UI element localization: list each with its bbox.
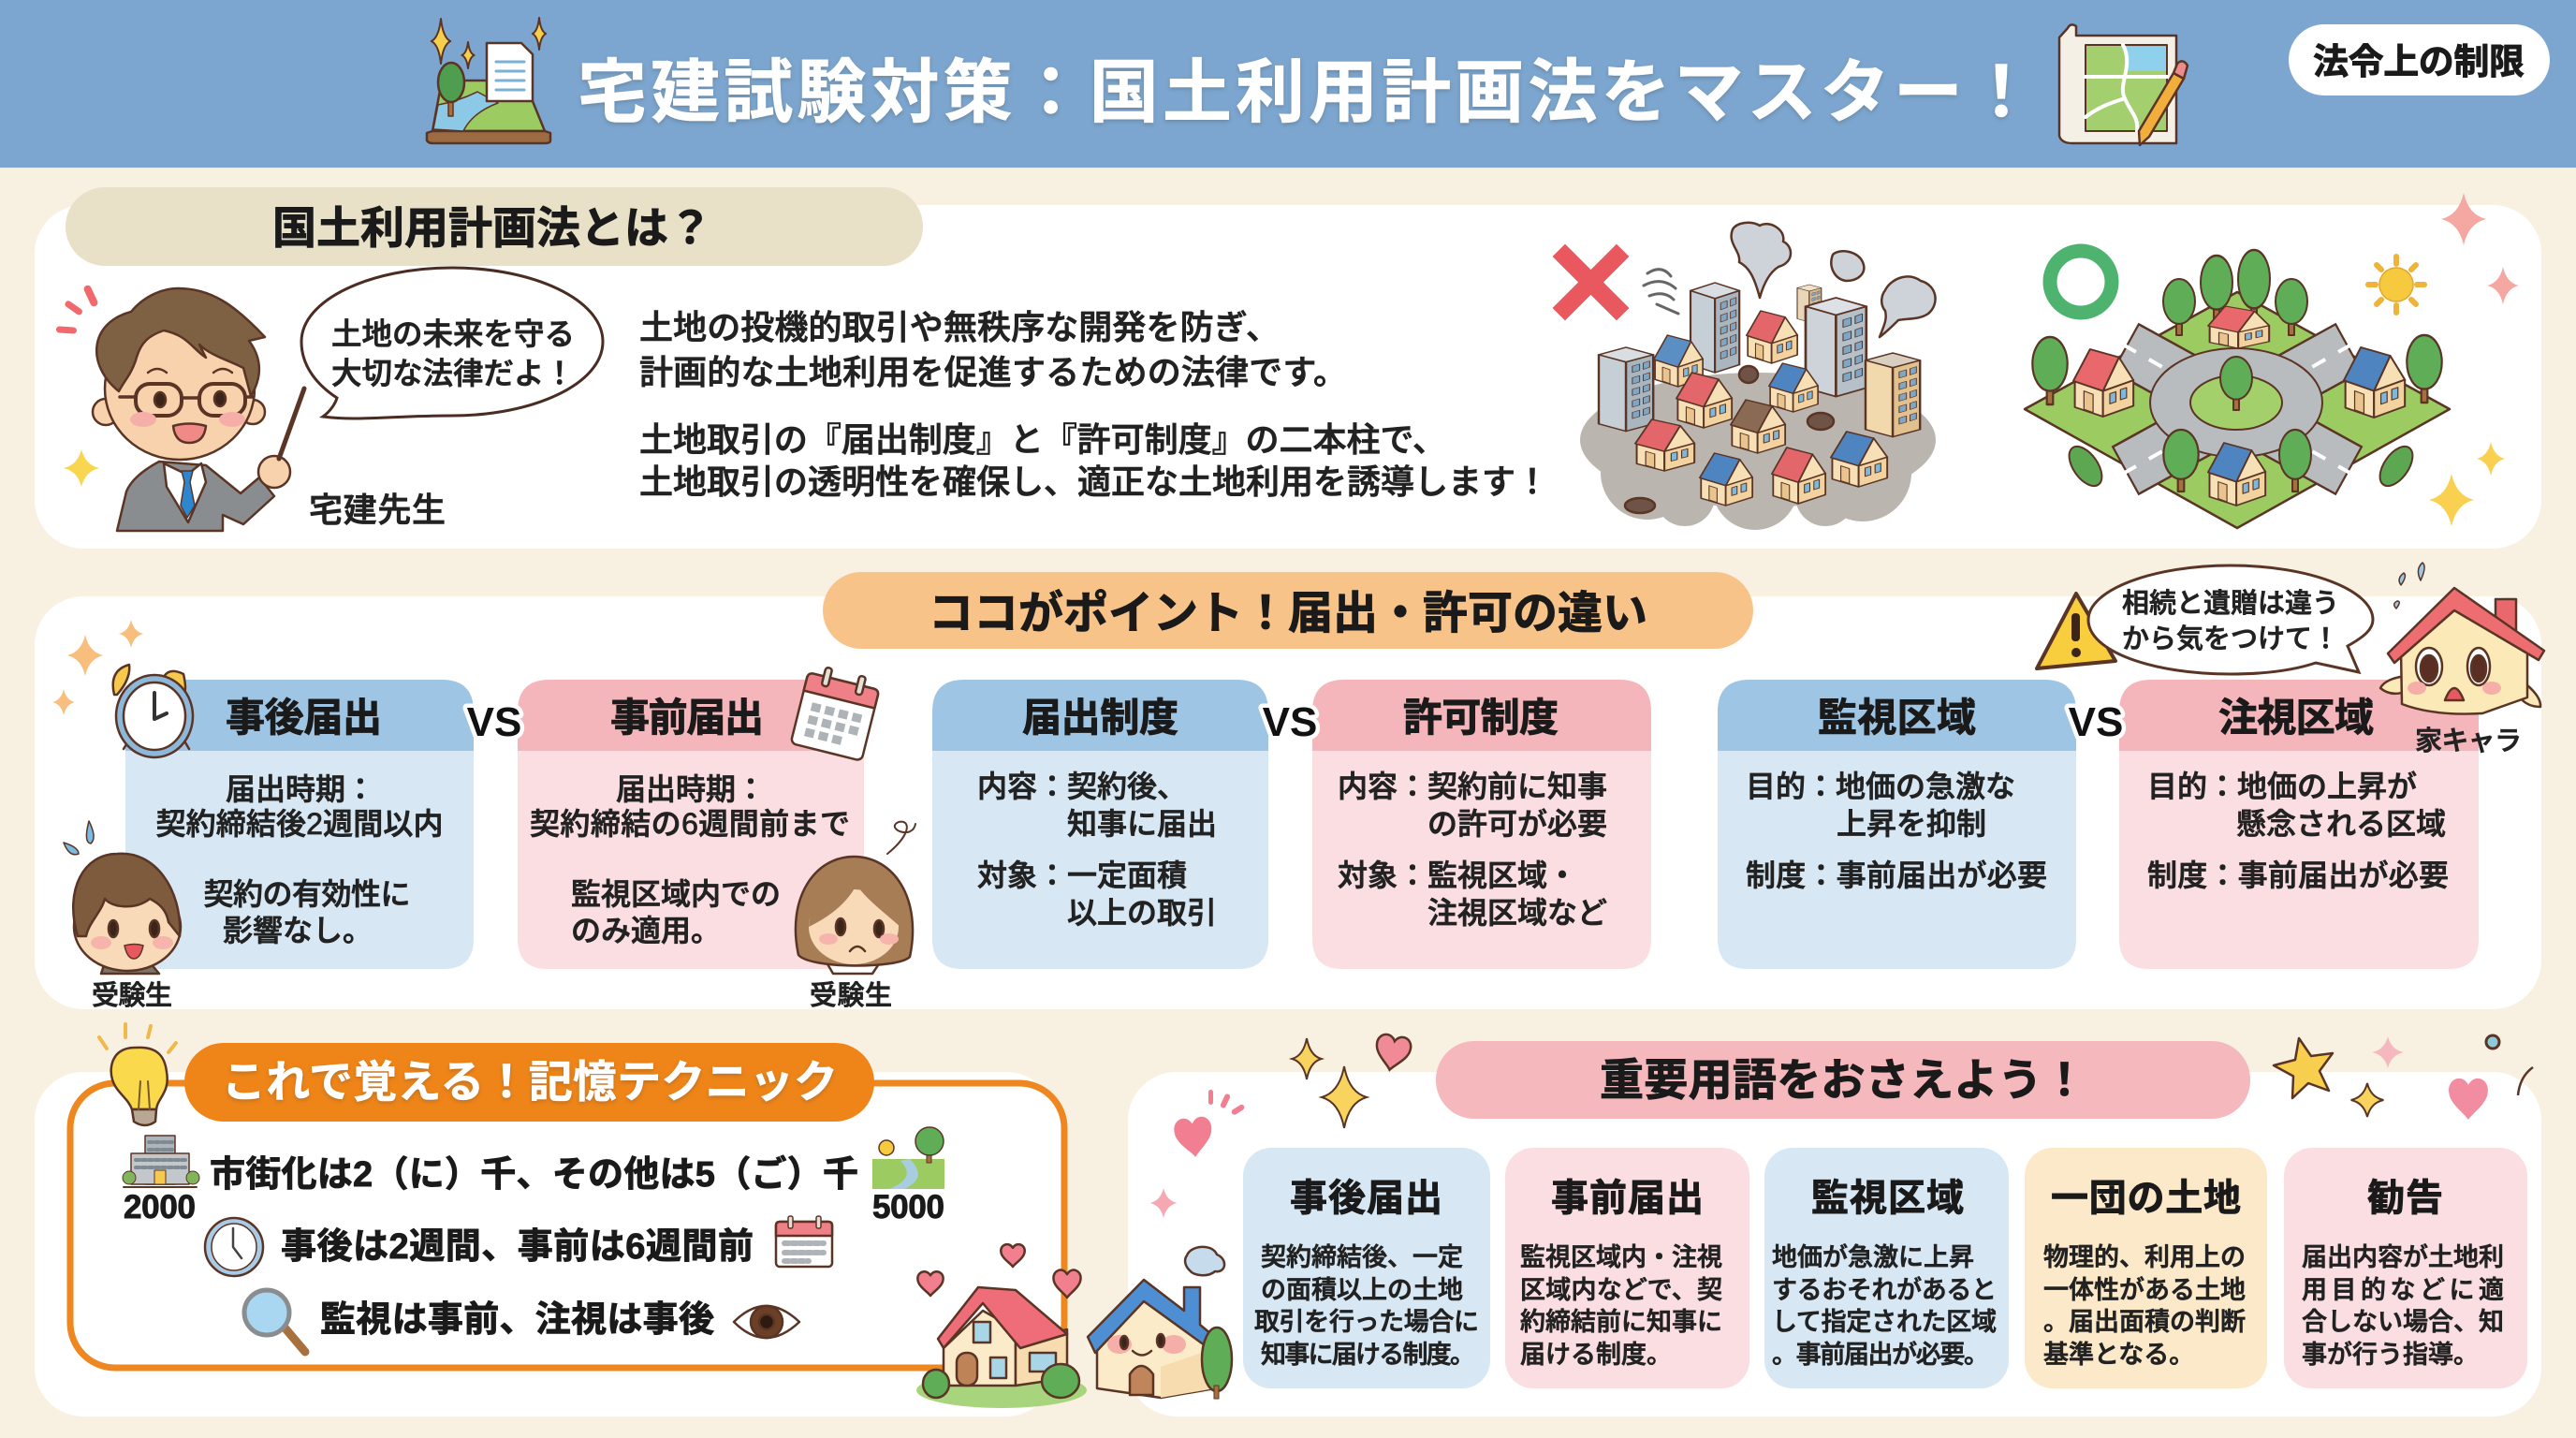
term card: 事前届出: 事前届出 <box>1551 1178 1704 1219</box>
card: 届出制度: 対象：一定面積 <box>977 858 1187 892</box>
panel: 国土利用計画法とは <box>35 187 2541 549</box>
term card: 勧告: 届出内容が土地利 <box>2302 1243 2504 1271</box>
card: 事前届出: 契約締結の6週間前まで <box>530 807 850 841</box>
term card: 事前届出: 区域内などで、契 <box>1520 1276 1722 1304</box>
vs badge: VS <box>1263 699 1317 745</box>
heading pill <box>823 572 1753 649</box>
card: 事後届出: 届出時期： <box>226 772 375 806</box>
sparkles <box>2429 193 2519 526</box>
speech bubble: teacher <box>301 268 603 418</box>
term card: 監視区域: 。事前届出が必要。 <box>1772 1341 1989 1369</box>
term card: 監視区域: して指定された区域 <box>1772 1308 1997 1336</box>
icon: calendar <box>791 664 882 761</box>
title: 宅建試験対策：国土利用計画法をマスター！ <box>578 53 2036 131</box>
term card: 事後届出: の面積以上の土地 <box>1261 1276 1463 1304</box>
illustration: blue roof house smiling <box>1088 1247 1232 1399</box>
term card: 事後届出: 契約締結後、一定 <box>1261 1243 1463 1271</box>
card: 注視区域: 懸念される区域 <box>2236 807 2446 841</box>
card: 許可制度 <box>1312 680 1651 969</box>
icon: warning triangle <box>2037 594 2115 668</box>
card: 事前届出: のみ適用。 <box>571 914 721 947</box>
icon: eye <box>734 1306 799 1338</box>
term card: 一団の土地: 。届出面積の判断 <box>2043 1308 2246 1336</box>
card: 事後届出: 契約締結後2週間以内 <box>155 807 444 841</box>
card: 事前届出: 届出時期： <box>616 772 766 806</box>
card: 監視区域: 上昇を抑制 <box>1837 807 1986 841</box>
vs badge: VS <box>2069 699 2123 745</box>
text: description: 計画的な土地利用を促進するための法律です。 <box>639 353 1347 391</box>
text: description: 土地の投機的取引や無秩序な開発を防ぎ、 <box>639 308 1280 346</box>
speech bubble: teacher: 土地の未来を守る <box>331 317 575 351</box>
term card: 監視区域: するおそれがあると <box>1772 1276 1997 1304</box>
term card: 監視区域: 監視区域 <box>1811 1178 1964 1219</box>
term card: 事前届出: 届ける制度。 <box>1520 1341 1672 1369</box>
speech bubble: house character: から気をつけて！ <box>2122 624 2339 654</box>
illustration: red roof house with hearts <box>916 1244 1087 1408</box>
icon: buildings <box>123 1136 199 1187</box>
card: 届出制度 <box>932 680 1268 969</box>
term card: 事前届出: 約締結前に知事に <box>1520 1308 1722 1336</box>
card: 事後届出: 契約の有効性に <box>204 877 410 911</box>
text: mnemonic 2: 事後は2週間、事前は6週間前 <box>281 1227 754 1267</box>
vs badge: VS <box>467 699 521 745</box>
heading pill: これで覚える！記憶テクニック <box>222 1057 838 1107</box>
card: 許可制度: 許可制度 <box>1403 696 1559 740</box>
panel: 届出・許可の違い <box>35 563 2544 1011</box>
icon: green circle <box>2050 251 2112 313</box>
card: 事前届出 <box>518 680 864 969</box>
text: mnemonic 3: 監視は事前、注視は事後 <box>320 1300 714 1340</box>
term card: 一団の土地: 物理的、利用上の <box>2043 1243 2246 1271</box>
term card: 一団の土地: 一体性がある土地 <box>2043 1276 2246 1304</box>
value: 5000: 5000 <box>872 1189 944 1225</box>
card: 届出制度: 内容：契約後、 <box>977 770 1187 803</box>
icon: light bulb <box>99 1024 176 1125</box>
card: 監視区域 <box>1718 680 2076 969</box>
label: 受験生: 受験生 <box>810 980 892 1011</box>
decorations: stars and hearts <box>1150 1033 2533 1218</box>
card: 監視区域: 目的：地価の急激な <box>1746 770 2015 803</box>
heading pill <box>1436 1041 2250 1119</box>
term card: 一団の土地 <box>2025 1148 2267 1388</box>
term card: 勧告: 勧告 <box>2367 1178 2443 1219</box>
heading pill: ココがポイント！届出・許可の違い <box>929 589 1647 638</box>
term card: 監視区域: 地価が急激に上昇 <box>1772 1243 1974 1271</box>
speech bubble: house character <box>2088 565 2373 674</box>
panel: 記憶テクニック <box>35 1024 1064 1416</box>
label: 受験生: 受験生 <box>92 980 172 1011</box>
badge: 法令上の制限: 法令上の制限 <box>2313 43 2525 82</box>
card: 届出制度: 以上の取引 <box>1067 896 1217 930</box>
sparkles <box>52 620 143 715</box>
value: 2000: 2000 <box>124 1189 196 1225</box>
icon: land and document <box>427 18 550 143</box>
illustration: disordered development <box>1580 223 1936 530</box>
card: 届出制度: 届出制度 <box>1022 696 1178 740</box>
heading pill <box>184 1043 874 1122</box>
heading pill <box>66 187 923 266</box>
card: 事後届出: 影響なし。 <box>223 914 373 947</box>
icon: red cross <box>1565 257 1617 308</box>
card: 注視区域: 制度：事前届出が必要 <box>2147 858 2449 892</box>
card: 事前届出: 事前届出 <box>610 696 764 740</box>
card: 注視区域: 注視区域 <box>2218 696 2374 740</box>
icon: clock <box>205 1218 263 1276</box>
icon: map and pencil <box>2059 24 2188 145</box>
text: description <box>639 308 1549 501</box>
text: mnemonic 2 <box>205 1216 832 1276</box>
speech bubble: teacher: 大切な法律だよ！ <box>331 357 575 390</box>
text: mnemonic 1 <box>123 1127 944 1225</box>
card: 届出制度: 知事に届出 <box>1067 807 1217 841</box>
character: teacher <box>56 284 304 531</box>
term card: 事後届出: 取引を行った場合に <box>1254 1308 1479 1336</box>
term card: 勧告: 用目的などに適 <box>2302 1276 2504 1304</box>
character: female student <box>796 822 915 974</box>
icon: magnifier <box>244 1290 305 1352</box>
character: worried house <box>2380 563 2544 714</box>
illustration: planned town <box>2025 250 2450 528</box>
card: 監視区域: 監視区域 <box>1818 696 1976 740</box>
card: 許可制度: の許可が必要 <box>1427 807 1607 841</box>
icon: alarm clock <box>113 665 193 757</box>
label: 家キャラ: 家キャラ <box>2415 726 2522 756</box>
card: 事後届出 <box>125 680 474 969</box>
card: 監視区域: 制度：事前届出が必要 <box>1746 858 2047 892</box>
card: 事前届出: 監視区域内での <box>571 877 781 911</box>
term card: 勧告: 事が行う指導。 <box>2302 1341 2479 1369</box>
header band <box>0 0 2576 168</box>
text: description: 土地取引の『届出制度』と『許可制度』の二本柱で、 <box>639 420 1446 459</box>
speech bubble: house character: 相続と遺贈は違う <box>2122 588 2339 619</box>
icon: landscape <box>872 1127 944 1189</box>
card: 許可制度: 対象：監視区域・ <box>1338 858 1577 892</box>
badge: 法令上の制限 <box>2289 24 2550 95</box>
text: mnemonic 1: 市街化は2（に）千、その他は5（ご）千 <box>210 1155 858 1195</box>
term card: 事前届出 <box>1505 1148 1749 1388</box>
term card: 事後届出 <box>1243 1148 1490 1388</box>
term card: 勧告 <box>2284 1148 2527 1388</box>
heading pill: 重要用語をおさえよう！ <box>1600 1055 2086 1105</box>
character: male student <box>64 821 181 974</box>
heading pill: 国土利用計画法とは？ <box>272 203 712 253</box>
card: 許可制度: 内容：契約前に知事 <box>1338 770 1607 803</box>
term card: 事後届出: 知事に届ける制度。 <box>1261 1341 1475 1369</box>
term card: 一団の土地: 一団の土地 <box>2051 1178 2241 1219</box>
icon: calendar <box>776 1216 832 1267</box>
term card: 勧告: 合しない場合、知 <box>2302 1308 2504 1336</box>
term card: 一団の土地: 基準となる。 <box>2043 1341 2194 1369</box>
panel: 重要用語 <box>1128 1033 2541 1416</box>
term card: 事後届出: 事後届出 <box>1290 1178 1442 1219</box>
icon: sun <box>2368 257 2424 313</box>
card: 事後届出: 事後届出 <box>226 696 382 740</box>
term card: 事前届出: 監視区域内・注視 <box>1520 1243 1722 1271</box>
text: description: 土地取引の透明性を確保し、適正な土地利用を誘導します！ <box>639 462 1549 501</box>
card: 注視区域: 目的：地価の上昇が <box>2147 770 2417 803</box>
term card: 監視区域 <box>1764 1148 2009 1388</box>
label: 宅建先生: 宅建先生 <box>309 491 446 529</box>
text: mnemonic 3 <box>244 1290 799 1352</box>
card: 注視区域 <box>2119 680 2479 969</box>
card: 許可制度: 注視区域など <box>1427 896 1607 930</box>
